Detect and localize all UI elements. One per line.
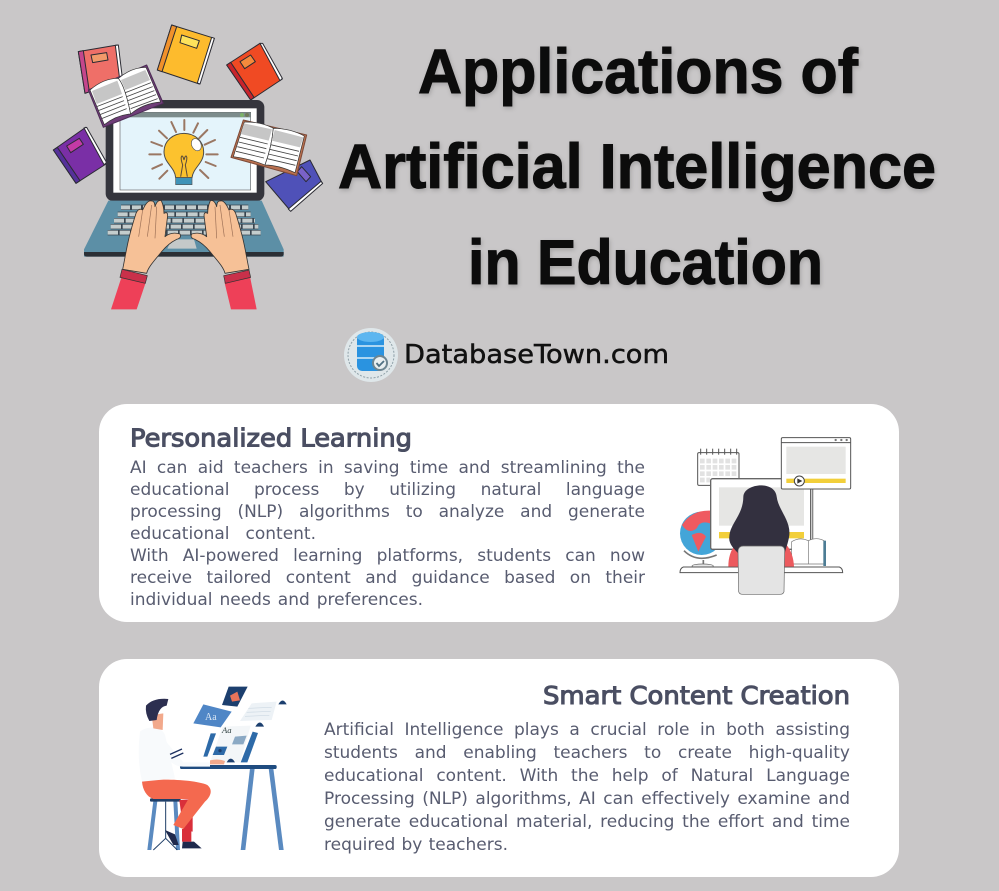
- desk: [680, 567, 843, 573]
- text block: personalized learning body: educational content.: [130, 524, 316, 544]
- icon: globe: [680, 511, 723, 568]
- text block: smart content creation body: [324, 720, 850, 855]
- text block: personalized learning body: AI can aid teachers in saving time and streamlining the: [130, 458, 645, 478]
- text block: personalized learning body: With AI-powered learning platforms, students can now: [130, 546, 645, 566]
- logo: DatabaseTown brand: [344, 328, 669, 382]
- illustration: man at desk with floating documents: [142, 686, 287, 850]
- brand name: DatabaseTown.com: [404, 340, 669, 370]
- icon: open book with brown cover: [231, 120, 307, 176]
- laptop screen: [106, 100, 264, 201]
- icon: database badge: [344, 328, 398, 382]
- icon: calendar: [698, 449, 739, 485]
- icon: red book: [227, 43, 282, 100]
- icon: yellow book: [157, 25, 214, 84]
- icon: pink book: [78, 45, 123, 93]
- icon: tablet with article: [203, 725, 258, 762]
- text block: personalized learning body: receive tailored content and guidance based on their: [130, 568, 645, 588]
- icon: seated man: [139, 699, 225, 848]
- title: in Education: [468, 228, 823, 298]
- icon: open book: [792, 539, 826, 566]
- text block: smart content creation body: generate educational material, reducing the effort and time: [324, 812, 850, 832]
- text block: smart content creation body: students and enabling teachers to create high-quality: [324, 743, 850, 763]
- text block: personalized learning body: processing (NLP) algorithms to analyze and generate: [130, 502, 645, 522]
- laptop base with keyboard: [84, 201, 284, 257]
- illustration: student at computer with globe: [680, 437, 852, 595]
- icon: tablet with article: Aa: [221, 725, 232, 735]
- icon: floating documents: [193, 687, 287, 727]
- icon: open book with purple cover: [88, 65, 163, 127]
- icon: light bulb: [149, 120, 218, 185]
- text block: personalized learning body: [130, 458, 645, 610]
- title: [338, 37, 936, 298]
- icon: student seated from behind: [728, 485, 794, 594]
- heading: personalized learning: Personalized Learning: [130, 424, 412, 452]
- title: Applications of: [418, 37, 859, 107]
- panel: smart content creation: [99, 659, 899, 877]
- icon: purple book: [53, 127, 107, 183]
- panel: personalized learning: [99, 404, 899, 622]
- text block: smart content creation body: Processing (NLP) algorithms, AI can effectively examine and: [324, 789, 850, 809]
- text block: smart content creation body: Artificial Intelligence plays a crucial role in both assisting: [324, 720, 850, 740]
- heading: smart content creation: Smart Content Creation: [543, 681, 850, 710]
- text block: smart content creation body: required by teachers.: [324, 835, 508, 855]
- icon: computer monitor: [711, 479, 813, 549]
- icon: blue book: [266, 160, 323, 211]
- text block: smart content creation body: educational content. With the help of Natural Language: [324, 766, 850, 786]
- icon: left hand and sleeve: [111, 200, 181, 309]
- illustration: laptop with books and light bulb: [52, 24, 324, 310]
- title: Artificial Intelligence: [338, 132, 936, 202]
- desk and stool: [147, 765, 284, 850]
- icon: right hand and sleeve: [191, 200, 257, 309]
- text block: personalized learning body: educational process by utilizing natural language: [130, 480, 645, 500]
- text block: personalized learning body: individual needs and preferences.: [130, 590, 423, 610]
- icon: floating documents: Aa: [205, 712, 217, 723]
- icon: video player window: [781, 438, 851, 489]
